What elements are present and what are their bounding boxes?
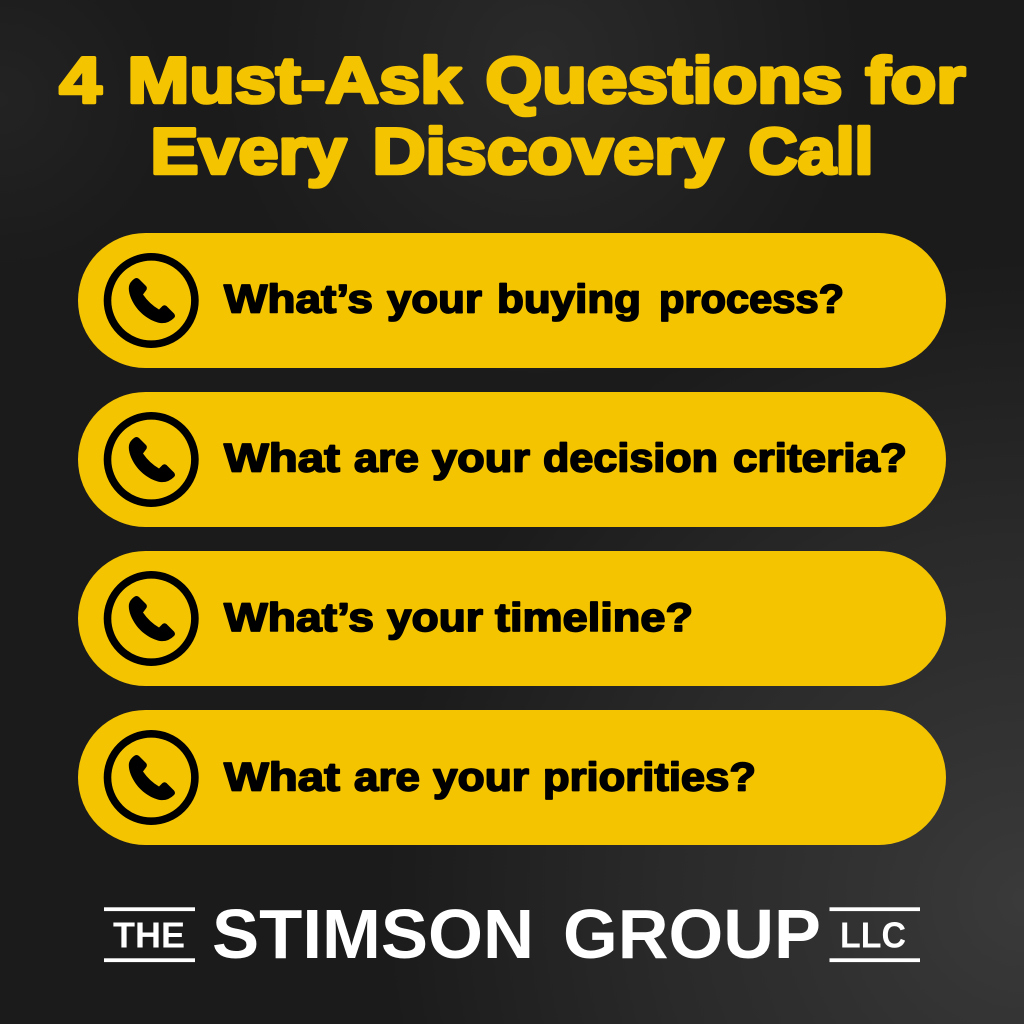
question text 4: What <box>224 755 340 799</box>
question text 3: your <box>387 596 483 640</box>
title: 4 <box>60 43 102 116</box>
title: Must-Ask <box>128 43 462 116</box>
question text 3: timeline? <box>495 596 693 640</box>
logo: The Stimson Group LLC: THE <box>113 914 185 955</box>
icon: phone 2 <box>108 416 195 503</box>
title <box>60 43 966 187</box>
question text 1: your <box>387 277 482 321</box>
panel: question 4 <box>78 710 946 845</box>
question text 4: are <box>354 755 420 799</box>
icon: phone 4 <box>108 734 195 821</box>
icon: phone 3 <box>108 575 195 662</box>
question text 1: process? <box>659 277 844 321</box>
question text 2: are <box>354 436 419 480</box>
title: Discovery <box>372 114 724 187</box>
question text 1: buying <box>497 277 641 321</box>
question text 1 <box>224 277 844 321</box>
question text 3 <box>224 596 693 640</box>
title: for <box>866 43 966 116</box>
question text 2: criteria? <box>733 436 907 480</box>
question text 3: What’s <box>224 596 374 640</box>
question text 1: What’s <box>224 277 373 321</box>
title: Questions <box>486 43 842 116</box>
question text 2: your <box>432 436 530 480</box>
question text 4: your <box>433 755 529 799</box>
icon: phone 1 <box>108 257 195 344</box>
logo: The Stimson Group LLC <box>104 895 920 973</box>
panel: question 1 <box>78 233 946 368</box>
panel: question 3 <box>78 551 946 686</box>
title: Call <box>748 114 874 187</box>
question text 2: What <box>224 436 340 480</box>
logo: The Stimson Group LLC: LLC <box>840 914 906 955</box>
logo: The Stimson Group LLC: GROUP <box>563 895 821 973</box>
logo: The Stimson Group LLC: STIMSON <box>212 895 534 973</box>
panel: question 2 <box>78 392 946 527</box>
question text 4: priorities? <box>543 755 756 799</box>
question text 4 <box>224 755 756 799</box>
question text 2: decision <box>543 436 718 480</box>
title: Every <box>150 114 346 187</box>
question text 2 <box>224 436 907 480</box>
